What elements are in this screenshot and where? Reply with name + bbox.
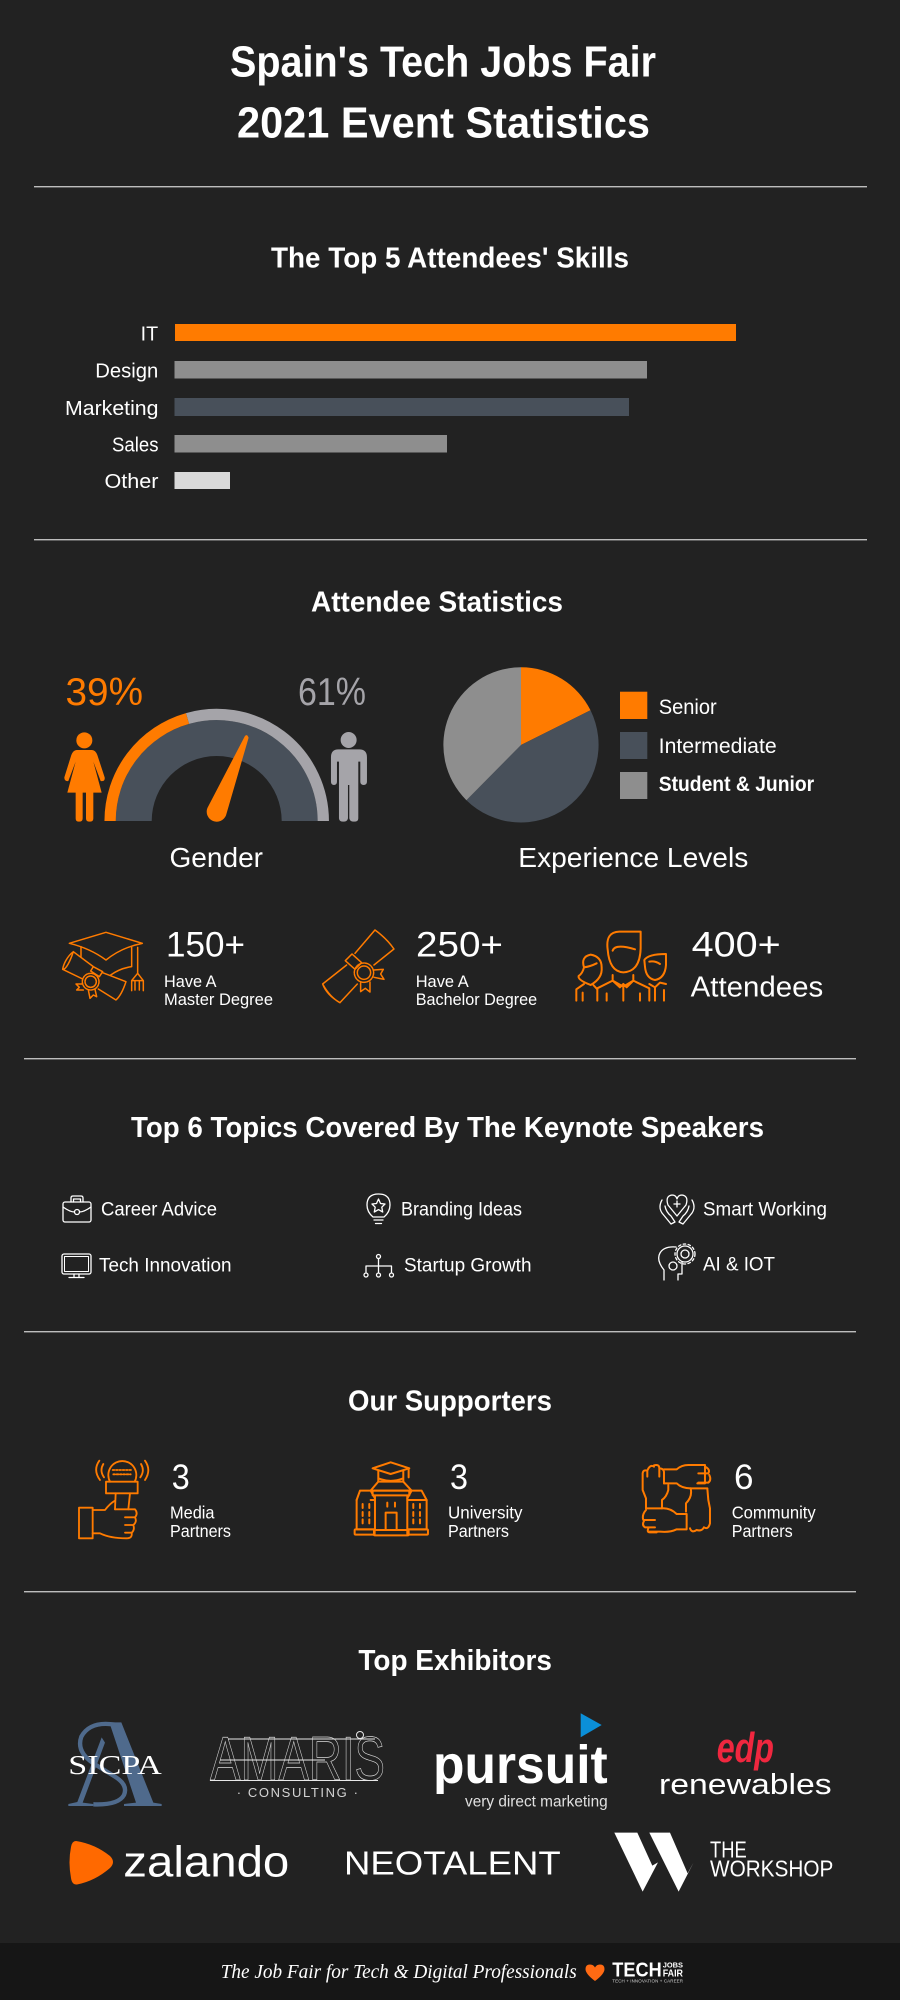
title — [230, 38, 656, 148]
supporter: community partners: Partners — [732, 1521, 793, 1541]
supporter: community partners: 6 — [734, 1458, 754, 1497]
stat: bachelor degree: 250+ — [416, 926, 503, 964]
logo: pursuit: very direct marketing — [465, 1794, 608, 1810]
stat: master degree: Master Degree — [164, 990, 273, 1009]
logo: amaris consulting: AMARIS — [210, 1725, 385, 1794]
legend: Senior — [659, 696, 717, 719]
bar chart: skills: IT — [141, 322, 159, 346]
title: Spain's Tech Jobs Fair — [230, 38, 656, 86]
bar chart: skills: Other — [104, 470, 159, 493]
topic: ai and iot — [659, 1244, 775, 1280]
topic: startup growth: Startup Growth — [404, 1256, 532, 1277]
panel: gender gauge: Gender — [170, 842, 263, 873]
icon: hand holding microphone — [79, 1461, 148, 1538]
logo: tech jobs fair: TECH + INNOVATION + CAREER — [612, 1978, 684, 1984]
panel: supporters — [79, 1386, 816, 1541]
logo: neotalent: NEOTALENT — [344, 1844, 561, 1881]
bar chart: skills: Design — [95, 360, 158, 382]
supporter: media partners: Partners — [170, 1521, 231, 1541]
stat: bachelor degree — [323, 926, 537, 1009]
footer band — [0, 1943, 900, 2000]
panel: gender gauge: 61% — [298, 671, 366, 714]
footer tagline: The Job Fair for Tech & Digital Professionals — [221, 1961, 577, 1983]
logo: tech jobs fair — [612, 1960, 684, 1984]
logo: sicpa — [68, 1722, 162, 1806]
icon: four linked hands — [643, 1465, 710, 1532]
supporter: community partners — [643, 1458, 816, 1541]
logo: zalando: zalando — [123, 1838, 289, 1887]
title: 2021 Event Statistics — [237, 98, 650, 148]
heading: exhibitors: Top Exhibitors — [358, 1645, 552, 1677]
heading: topics: Top 6 Topics Covered By The Keynote Speakers — [131, 1112, 764, 1144]
bar chart: skills: Marketing — [65, 397, 158, 420]
supporter: university partners: Partners — [448, 1521, 509, 1541]
topic: career advice: Career Advice — [101, 1200, 217, 1221]
panel: gender gauge: 39% — [66, 671, 143, 714]
stat: master degree: Have A — [164, 972, 217, 991]
logo: tech jobs fair: FAIR — [663, 1968, 684, 1980]
panel: exhibitors — [68, 1645, 833, 1892]
supporter: university partners: 3 — [450, 1458, 468, 1497]
panel: gender gauge — [64, 671, 367, 873]
icon: man — [331, 732, 367, 822]
topic: smart working: Smart Working — [703, 1200, 827, 1221]
stat: attendees: Attendees — [691, 972, 823, 1004]
pie chart — [443, 667, 599, 822]
icon: people group — [576, 932, 666, 1001]
stat: master degree — [63, 926, 273, 1009]
topic: career advice — [63, 1196, 217, 1222]
logo: pursuit — [433, 1713, 608, 1810]
legend: Intermediate — [659, 735, 777, 758]
stat: attendees — [576, 926, 823, 1004]
logo: the workshop: THE — [710, 1836, 747, 1862]
logo: edp renewables: renewables — [659, 1769, 832, 1801]
logo: the workshop — [614, 1833, 833, 1892]
panel: skills — [65, 242, 736, 493]
logo: edp renewables — [659, 1724, 832, 1801]
heading: skills: The Top 5 Attendees' Skills — [271, 242, 629, 274]
logo: edp renewables: edp — [717, 1724, 774, 1771]
icon: heart — [586, 1964, 604, 1981]
supporter: community partners: Community — [732, 1503, 816, 1523]
heading: supporters: Our Supporters — [348, 1386, 552, 1418]
logo: the workshop: WORKSHOP — [710, 1856, 833, 1882]
legend: Student & Junior — [659, 773, 814, 796]
panel: experience levels — [443, 667, 814, 873]
supporter: media partners: Media — [170, 1503, 215, 1523]
logo: tech jobs fair: TECH — [612, 1960, 662, 1982]
icon: graduation cap and diploma — [63, 932, 143, 1000]
bar chart: skills — [65, 322, 736, 493]
logo: sicpa: SICPA — [68, 1750, 162, 1780]
topic: smart working — [660, 1195, 827, 1224]
bar chart: skills: Sales — [112, 434, 158, 456]
topic: branding ideas — [367, 1194, 522, 1224]
panel: keynote topics — [62, 1112, 827, 1280]
topic: ai and iot: AI & IOT — [703, 1255, 775, 1276]
stat: master degree: 150+ — [166, 926, 245, 964]
stat: bachelor degree: Have A — [416, 972, 469, 991]
icon: university building — [355, 1462, 428, 1535]
panel: experience levels: Experience Levels — [518, 842, 748, 873]
logo: amaris consulting — [210, 1725, 385, 1800]
heading: attendee statistics: Attendee Statistics — [311, 586, 563, 618]
supporter: media partners: 3 — [172, 1458, 190, 1497]
logo: pursuit: pursuit — [433, 1735, 608, 1795]
stat: bachelor degree: Bachelor Degree — [416, 990, 537, 1009]
stat: attendees: 400+ — [692, 926, 781, 964]
topic: tech innovation — [62, 1254, 232, 1278]
topic: tech innovation: Tech Innovation — [99, 1256, 232, 1277]
supporter: university partners: University — [448, 1503, 523, 1523]
icon: woman — [64, 732, 105, 822]
gauge chart — [110, 714, 323, 822]
legend — [620, 692, 814, 799]
supporter: media partners — [79, 1458, 231, 1541]
topic: branding ideas: Branding Ideas — [401, 1200, 522, 1221]
logo: amaris consulting: · CONSULTING · — [237, 1785, 358, 1800]
supporter: university partners — [355, 1458, 523, 1541]
icon: diploma — [323, 930, 394, 1003]
logo: tech jobs fair: JOBS — [663, 1960, 683, 1970]
